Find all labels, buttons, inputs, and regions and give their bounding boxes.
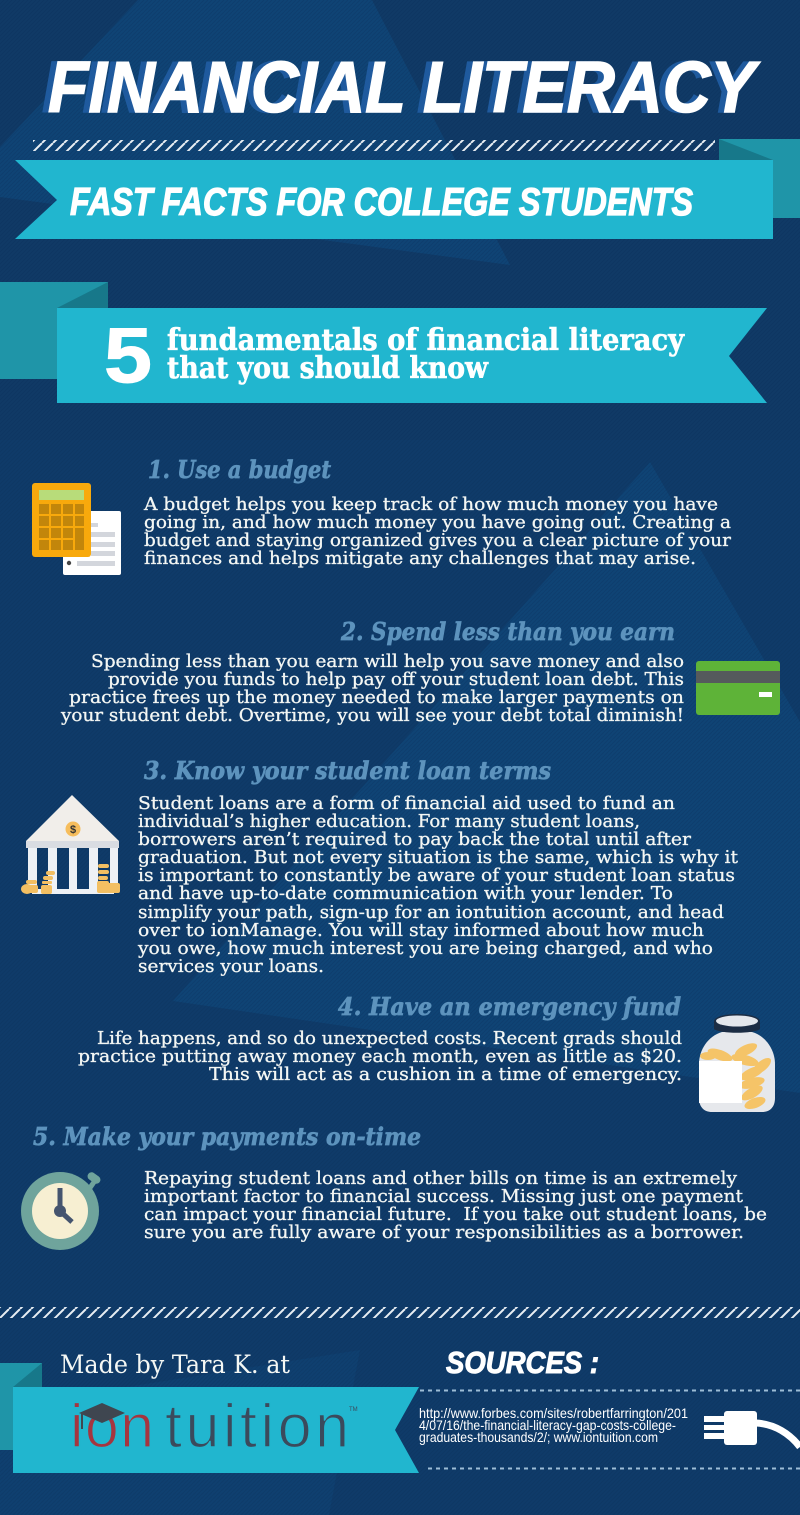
text block 5: important factor to financial success. Missing just one payment [144, 1186, 744, 1207]
banner: iontuition logo: tuition [165, 1392, 349, 1460]
text block 2: Spending less than you earn will help you save money and also [91, 651, 684, 672]
text block 3: over to ionManage. You will stay informed about how much [138, 920, 704, 941]
banner: iontuition logo: TM [349, 1407, 358, 1413]
sources text [419, 1405, 688, 1445]
hatched divider bottom [0, 1307, 800, 1318]
icon: credit card [696, 661, 780, 715]
section 2: spend less [60, 617, 780, 726]
credit line: Made by Tara K. at [60, 1350, 290, 1379]
banner: iontuition logo: ion [70, 1392, 154, 1460]
text block 1: finances and helps mitigate any challenges that may arise. [144, 548, 696, 569]
text block 4 [78, 1028, 682, 1085]
text block 1 [143, 494, 731, 569]
text block 3: graduation. But not every situation is the same, which is why it [138, 847, 739, 868]
text block 2 [60, 651, 684, 726]
text block 4: practice putting away money each month, even as little as $20. [78, 1046, 682, 1067]
text block 1: budget and staying organized gives you a clear picture of your [144, 530, 731, 551]
heading 2: 2. Spend less than you earn [340, 617, 675, 646]
text block 3: simplify your path, sign-up for an iontuition account, and head [138, 902, 724, 923]
text block 2: practice frees up the money needed to make larger payments on [69, 687, 684, 708]
sources text: http://www.forbes.com/sites/robertfarrington/201 [419, 1405, 688, 1421]
dotted rule top [420, 1390, 800, 1392]
sources heading: SOURCES : [446, 1345, 599, 1380]
text block 4: This will act as a cushion in a time of emergency. [209, 1064, 682, 1085]
banner: iontuition logo [0, 1363, 419, 1473]
sources text: 4/07/16/the-financial-literacy-gap-costs-college- [419, 1417, 676, 1433]
banner: 5 fundamentals: 5 [104, 311, 152, 399]
section 5: payments on time [21, 1122, 767, 1250]
text block 5: can impact your financial future. If you take out student loans, be [144, 1204, 767, 1225]
text block 3: borrowers aren’t required to pay back the total until after [138, 829, 691, 850]
text block 3: Student loans are a form of financial aid used to fund an [138, 793, 675, 814]
section 1: use a budget [32, 455, 731, 575]
section 4: emergency fund [78, 992, 775, 1112]
icon: bank [21, 795, 120, 894]
text block 1: A budget helps you keep track of how much money you have [143, 494, 718, 515]
banner: 5 fundamentals: that you should know [167, 351, 489, 386]
dotted rule bottom [428, 1468, 800, 1470]
text block 3: services your loans. [138, 956, 324, 977]
heading 1: 1. Use a budget [148, 455, 331, 484]
text block 1: going in, and how much money you have going out. Creating a [144, 512, 731, 533]
title: FINANCIAL LITERACY [48, 48, 761, 128]
text block 3: individual’s higher education. For many student loans, [138, 811, 640, 832]
text block 3: you owe, how much interest you are being charged, and who [137, 938, 713, 959]
icon: bank: $ [70, 824, 76, 836]
text block 3 [137, 793, 739, 977]
section 3: student loan terms [21, 756, 739, 977]
heading 3: 3. Know your student loan terms [144, 756, 551, 785]
hatched divider top [33, 140, 715, 151]
icon: calculator and paper [32, 483, 121, 575]
icon: stopwatch [21, 1171, 102, 1250]
banner: 5 fundamentals [0, 282, 767, 403]
text block 4: Life happens, and so do unexpected costs. Recent grads should [97, 1028, 682, 1049]
heading 5: 5. Make your payments on-time [33, 1122, 421, 1151]
text block 2: your student debt. Overtime, you will see your debt total diminish! [60, 705, 684, 726]
text block 5: Repaying student loans and other bills on time is an extremely [144, 1168, 738, 1189]
text block 5 [144, 1168, 767, 1243]
text block 2: provide you funds to help pay off your student loan debt. This [108, 669, 684, 690]
text block 3: is important to constantly be aware of your student loan status [138, 865, 735, 886]
banner: fast facts: FAST FACTS FOR COLLEGE STUDENTS [70, 181, 693, 224]
title: FINANCIAL LITERACY [42, 48, 755, 128]
sources text: graduates-thousands/2/; www.iontuition.com [419, 1429, 658, 1445]
text block 5: sure you are fully aware of your responsibilities as a borrower. [144, 1222, 744, 1243]
banner: fast facts [15, 139, 800, 239]
icon: jar of coins [699, 1014, 775, 1112]
heading 4: 4. Have an emergency fund [338, 992, 681, 1021]
banner: 5 fundamentals: fundamentals of financial literacy [167, 323, 685, 358]
icon: plug [704, 1411, 800, 1447]
text block 3: and have up-to-date communication with your lender. To [138, 883, 673, 904]
